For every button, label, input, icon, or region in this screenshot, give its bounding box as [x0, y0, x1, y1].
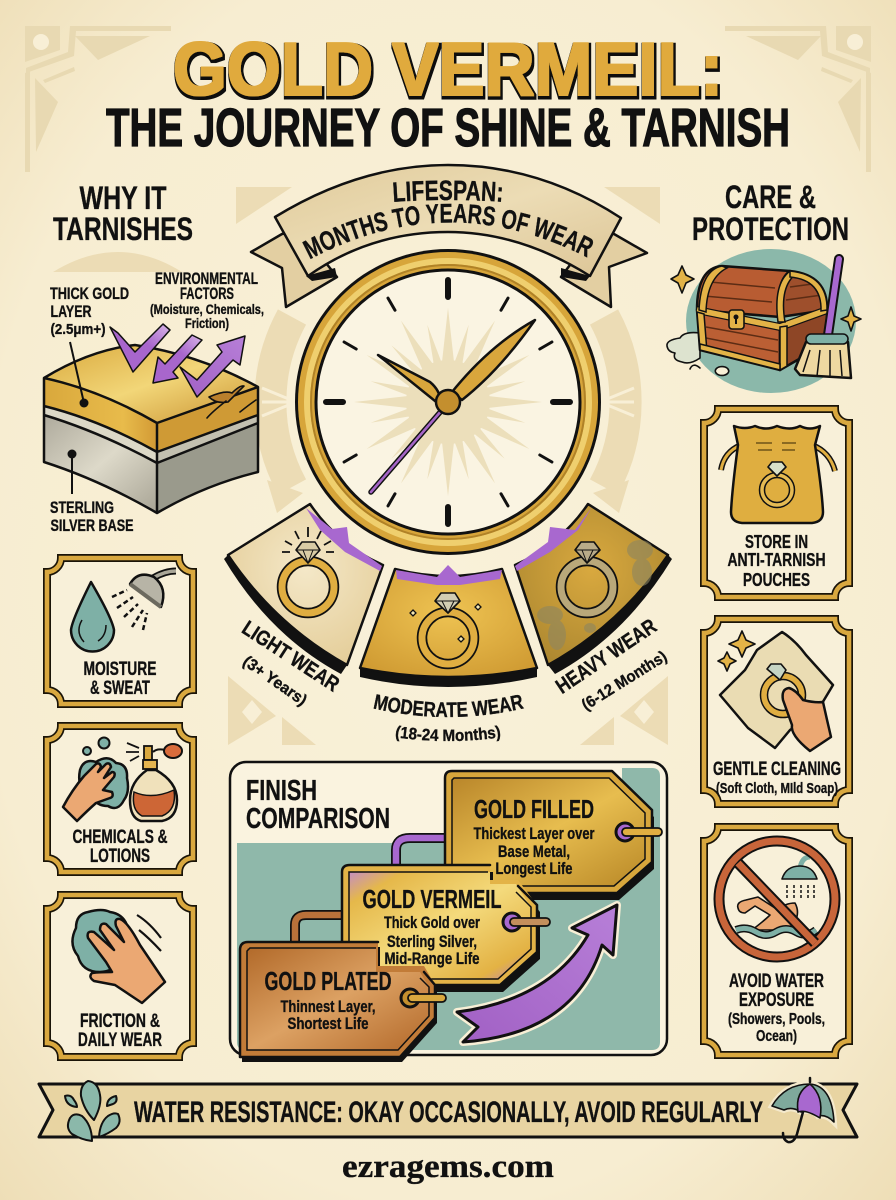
title: gold vermeil: GOLD VERMEIL:	[173, 27, 723, 111]
label: & SWEAT	[90, 678, 150, 699]
label: thick gold layer: (2.5μm+)	[50, 321, 106, 338]
banner: water resistance	[39, 1078, 857, 1142]
label: thick gold layer	[50, 285, 129, 338]
purple loop	[396, 838, 448, 867]
label: (Soft Cloth, MIld Soap)	[716, 780, 838, 797]
ribbon tails	[251, 230, 337, 307]
panel: friction and daily wear	[47, 895, 193, 1057]
label	[84, 659, 156, 699]
heading: care and protection: CARE &	[725, 179, 816, 215]
wear segment: moderate wear	[360, 565, 537, 687]
icon: slightly worn ring	[410, 593, 481, 664]
silver layers	[44, 406, 157, 463]
icon: sponge	[79, 758, 128, 808]
label: LOTIONS	[90, 846, 150, 867]
tag: gold filled: Thickest Layer over	[474, 825, 595, 843]
icon: swimmer	[738, 897, 798, 930]
label: CHEMICALS &	[72, 827, 168, 848]
diagram: gold layer over silver base	[44, 324, 258, 513]
minute hand	[452, 320, 535, 400]
label: light wear: LIGHT WEAR	[238, 617, 343, 696]
tag: gold vermeil: GOLD VERMEIL	[362, 884, 502, 914]
pointer dots	[70, 342, 84, 403]
panel: finish comparison	[230, 762, 667, 1062]
chest lid	[697, 266, 790, 317]
panel: moisture and sweat	[47, 558, 193, 704]
top gold face	[44, 345, 258, 423]
tarnish blotches	[537, 540, 653, 650]
hour hand	[378, 355, 440, 405]
label: Ocean)	[756, 1028, 797, 1045]
label: thick gold layer: THICK GOLD	[50, 285, 129, 303]
label: environmental factors	[150, 270, 264, 331]
tag: gold plated: Shortest Life	[288, 1015, 368, 1033]
label: heavy wear	[552, 615, 670, 714]
label: FRICTION &	[80, 1011, 160, 1032]
tag: gold vermeil: Sterling Silver,	[387, 933, 477, 951]
broom handle	[828, 259, 839, 335]
heading: care and protection: PROTECTION	[692, 211, 849, 247]
label: MOISTURE	[84, 659, 156, 680]
banner: lifespan: MONTHS TO YEARS OF WEAR	[302, 204, 594, 260]
icon: perfume bottle	[126, 743, 182, 821]
decoration: top-left corner ornament	[25, 26, 171, 172]
label: thick gold layer: LAYER	[50, 303, 92, 321]
label: heavy wear: HEAVY WEAR	[552, 615, 661, 699]
lifespan text: LIFESPAN:	[393, 180, 502, 202]
label: light wear: (3+ Years)	[239, 653, 310, 709]
clock hub	[436, 390, 460, 414]
teal background	[237, 768, 660, 1050]
icon: sponge	[72, 910, 128, 972]
gold side layers	[44, 378, 157, 452]
label: POUCHES	[743, 569, 810, 590]
icon: water splash	[65, 1081, 120, 1141]
chest trim	[697, 310, 827, 327]
icon: tarnished ring	[561, 542, 613, 613]
icon: hand	[63, 763, 115, 821]
clock bezel	[295, 249, 601, 555]
decoration: top-right corner ornament	[725, 26, 871, 172]
clock ticks	[284, 238, 612, 566]
label: environmental factors: Friction)	[185, 315, 229, 331]
label: heavy wear: (6-12 Months)	[579, 648, 670, 714]
panel: store in anti-tarnish pouches	[704, 409, 849, 597]
label	[78, 1011, 162, 1051]
tag: gold vermeil	[342, 865, 550, 992]
label: moderate wear	[374, 694, 524, 742]
finish comparison heading: FINISH	[246, 775, 317, 807]
tag: gold vermeil: Thick Gold over	[384, 914, 480, 932]
label: sterling silver base: SILVER BASE	[50, 516, 134, 535]
label: AVOID WATER	[729, 971, 824, 992]
icon: motion lines	[137, 915, 161, 951]
tag: gold filled: GOLD FILLED	[474, 794, 594, 824]
icon: hand	[783, 688, 831, 751]
copper loop	[295, 915, 345, 944]
finish comparison heading: COMPARISON	[246, 803, 390, 835]
label: environmental factors: FACTORS	[180, 285, 234, 303]
label: moderate wear: (18-24 Months)	[396, 725, 500, 742]
wear segment: light wear	[224, 504, 383, 674]
icon: umbrella	[772, 1078, 834, 1142]
purple second hand	[371, 410, 442, 492]
tarnish band	[396, 565, 502, 585]
icon: water drop	[71, 582, 114, 652]
label: sterling silver base: STERLING	[50, 498, 114, 517]
sunburst on clock face	[354, 308, 542, 496]
icon: treasure chest and broom	[667, 249, 861, 393]
label	[728, 971, 825, 1045]
label	[728, 531, 826, 590]
tarnish patch and cracks	[209, 386, 244, 402]
tag: gold filled: Longest Life	[496, 860, 572, 878]
icon: polishing cloth	[720, 632, 833, 748]
label: STORE IN	[745, 531, 808, 552]
panel: avoid water exposure	[704, 827, 849, 1055]
icon: pouch	[731, 426, 823, 523]
label	[72, 827, 168, 867]
tarnish band	[306, 508, 382, 571]
icon: hand	[88, 919, 165, 1003]
tag: gold filled	[445, 771, 662, 900]
chest lock	[729, 310, 744, 329]
heading: why it tarnishes	[53, 180, 193, 247]
tag: gold plated: GOLD PLATED	[264, 966, 392, 996]
tag: gold plated	[240, 942, 446, 1062]
icon: prohibition sign	[719, 841, 835, 957]
chest planks	[704, 282, 822, 352]
chest body	[697, 310, 780, 370]
tag: gold filled: Base Metal,	[498, 843, 570, 861]
label	[713, 759, 841, 797]
wear segment: heavy wear	[515, 504, 672, 674]
label: environmental factors: (Moisture, Chemicals,	[150, 301, 264, 317]
label: GENTLE CLEANING	[713, 759, 841, 780]
label: ANTI-TARNISH	[728, 549, 826, 570]
icon: waves	[736, 928, 816, 935]
label: sterling silver base	[50, 498, 134, 535]
icon: bubbles	[83, 738, 110, 755]
finish comparison heading	[246, 775, 390, 835]
tag: gold plated: Thinnest Layer,	[280, 998, 376, 1016]
arrows: environmental factors	[110, 324, 170, 372]
label: EXPOSURE	[739, 990, 814, 1011]
panel: chemicals and lotions	[47, 726, 193, 872]
label: moderate wear: MODERATE WEAR	[374, 694, 524, 718]
dust cloud	[667, 333, 700, 363]
icon: ring	[764, 676, 802, 714]
icon: shower head	[782, 857, 817, 900]
icon: pouch strings	[721, 445, 835, 471]
tag: gold vermeil: Mid-Range Life	[384, 950, 480, 968]
clock	[284, 238, 612, 566]
icon: ring on pouch	[762, 475, 792, 505]
label: DAILY WEAR	[78, 1030, 162, 1051]
sparkles	[671, 266, 694, 293]
arrow: upward progression	[457, 905, 617, 1042]
footer: website: ezragems.com	[342, 1149, 554, 1185]
panel: gentle cleaning	[704, 619, 849, 804]
heading: why it tarnishes: TARNISHES	[53, 211, 193, 247]
ribbon main	[275, 165, 621, 276]
label: environmental factors: ENVIRONMENTAL	[155, 270, 258, 288]
heading: why it tarnishes: WHY IT	[80, 180, 167, 216]
broom bristles	[795, 342, 851, 378]
icon: sparkles	[718, 631, 755, 671]
decoration: art deco shapes behind the clock	[53, 187, 668, 745]
label: (Showers, Pools,	[728, 1011, 825, 1028]
tarnish band	[515, 507, 592, 571]
banner: lifespan	[250, 164, 648, 308]
heading: care and protection	[692, 179, 849, 247]
block outlines	[44, 345, 258, 513]
icon: shower head	[112, 571, 176, 630]
icon: shining ring	[282, 527, 334, 613]
